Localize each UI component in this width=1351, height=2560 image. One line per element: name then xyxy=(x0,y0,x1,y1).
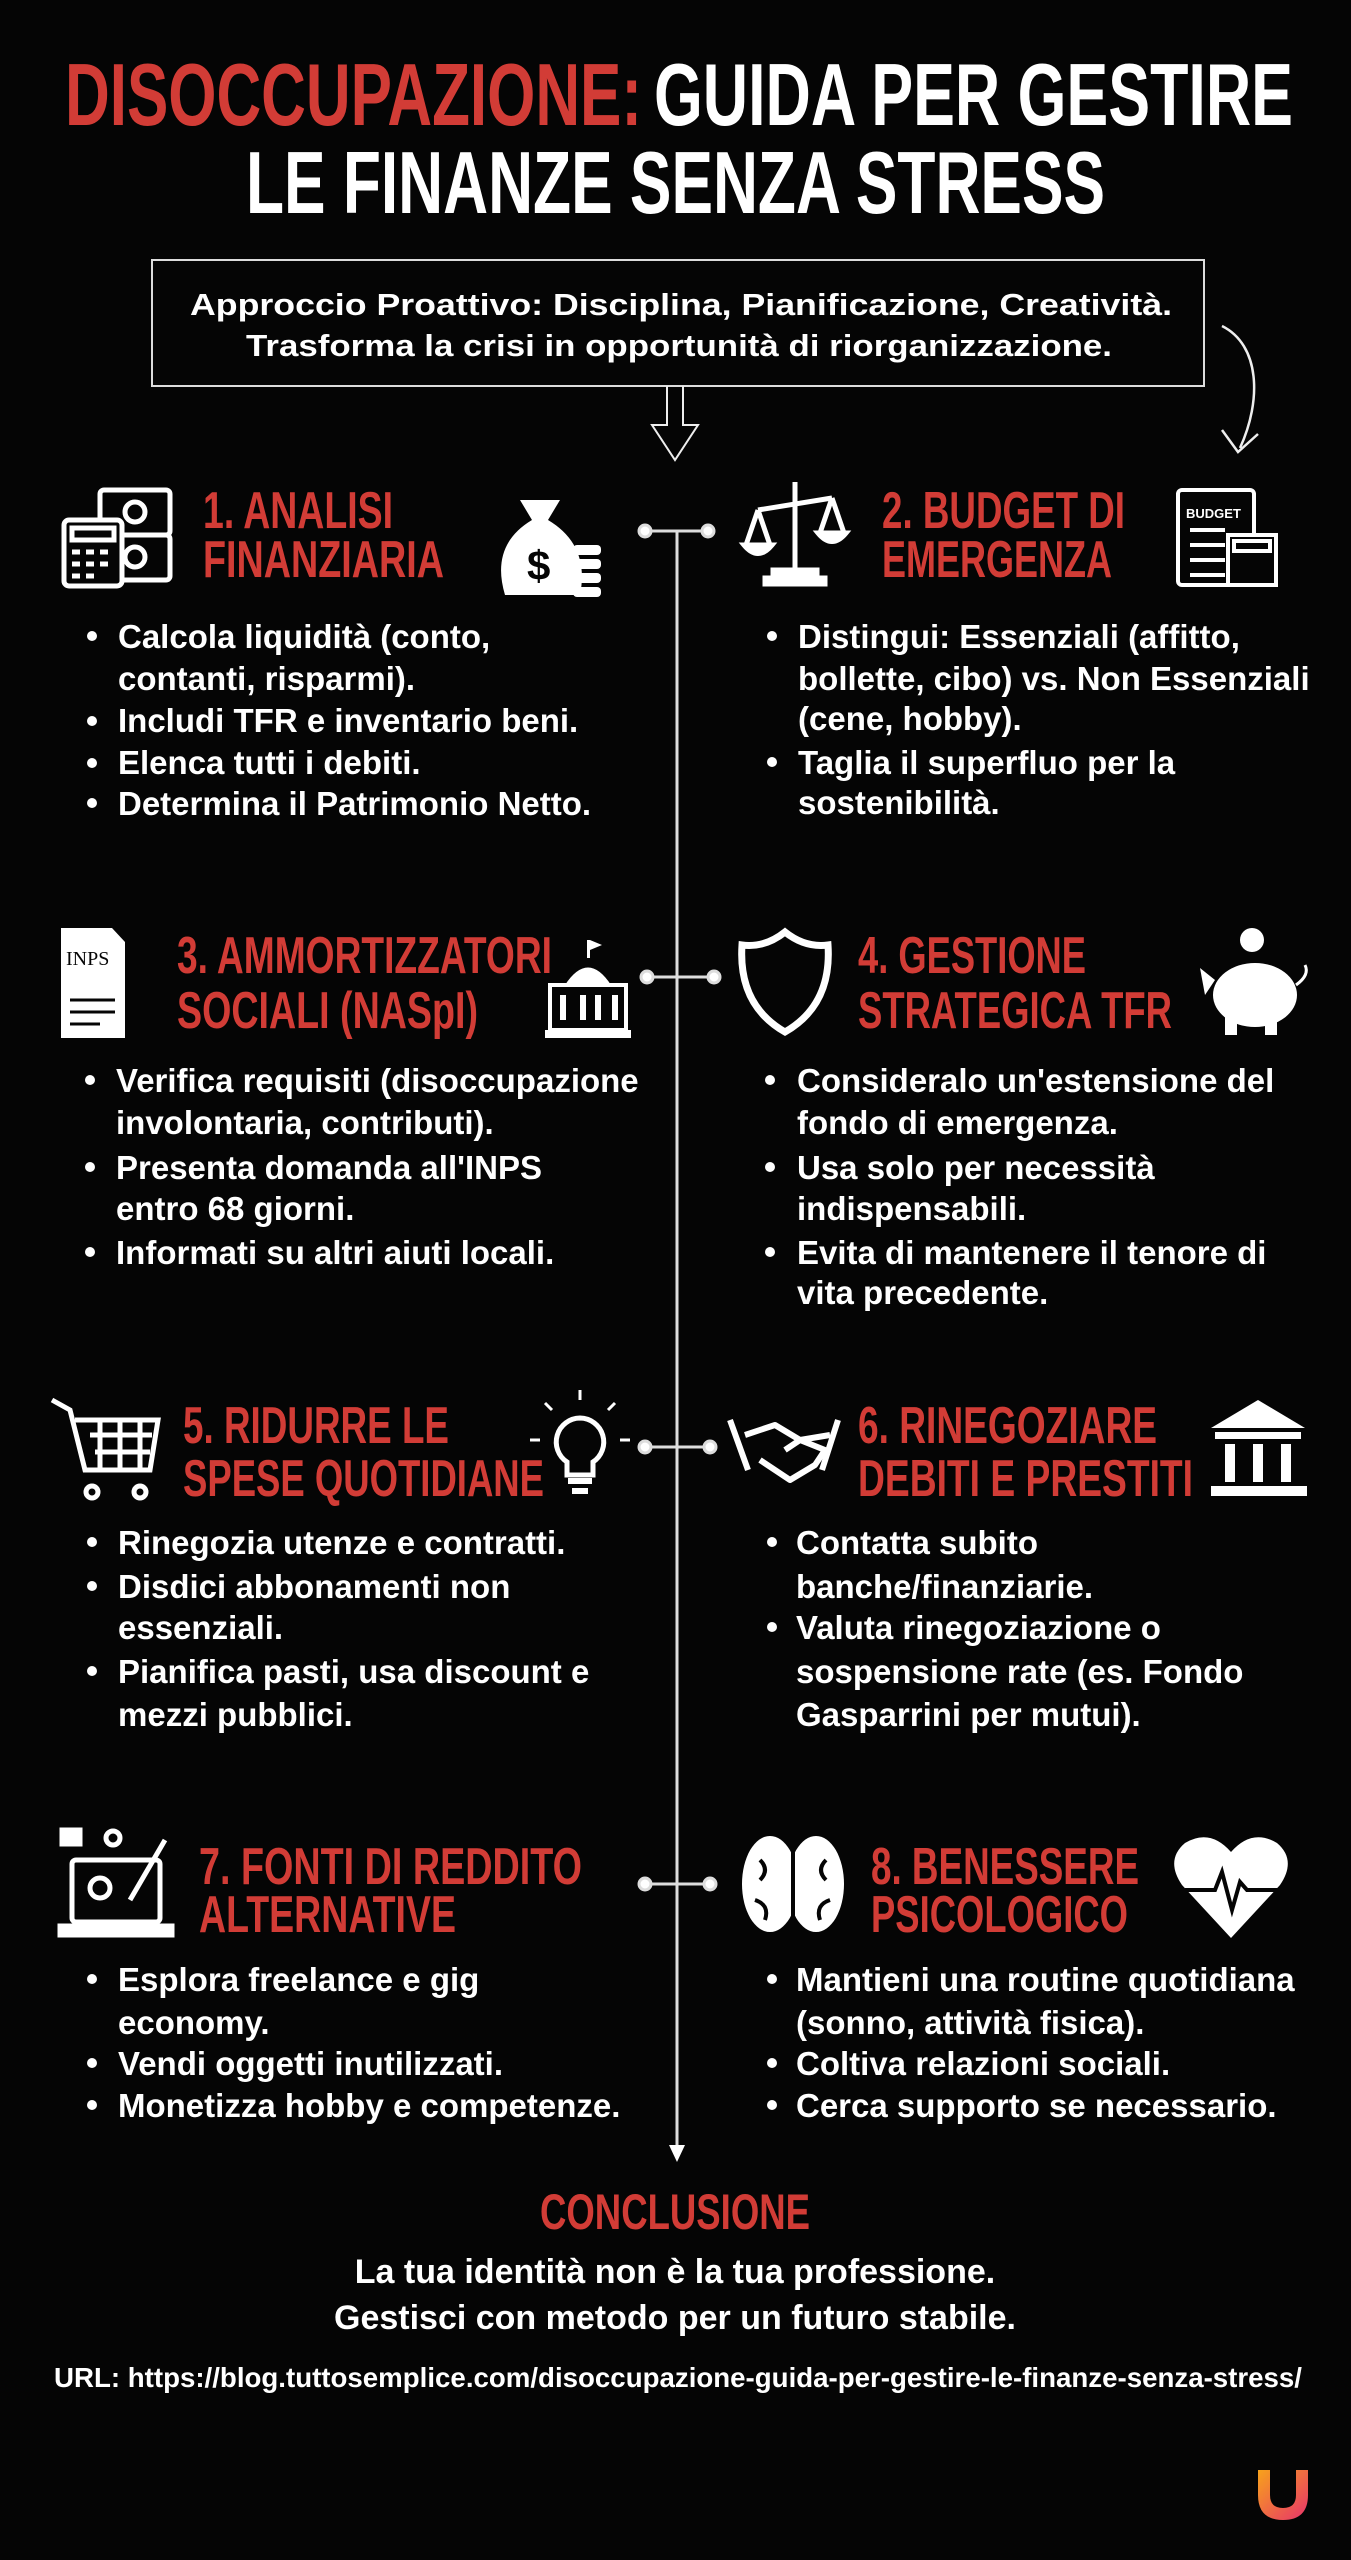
heading: 1. ANALISI xyxy=(203,482,393,540)
panel: 5 ridurre le spese: SPESE QUOTIDIANE xyxy=(183,1450,544,1508)
bullets: Informati su altri aiuti locali. xyxy=(116,1234,554,1271)
bullets: Determina il Patrimonio Netto. xyxy=(118,785,591,822)
timeline line xyxy=(639,525,720,2162)
conclusion: Gestisci con metodo per un futuro stabile. xyxy=(334,2299,1016,2337)
title xyxy=(65,45,1293,232)
bullets: Rinegozia utenze e contratti. xyxy=(118,1524,565,1561)
bullets: Vendi oggetti inutilizzati. xyxy=(118,2045,503,2082)
bullets: sostenibilità. xyxy=(798,784,1000,821)
intro box xyxy=(152,260,1204,386)
panel: 4 gestione strategica TFR xyxy=(742,927,1306,1311)
panel: 5 ridurre le spese xyxy=(52,1390,630,1733)
icon: heart with pulse xyxy=(1174,1837,1288,1938)
bullets: banche/finanziarie. xyxy=(796,1568,1093,1605)
bullets: Elenca tutti i debiti. xyxy=(118,744,421,781)
panel: 3 ammortizzatori sociali xyxy=(61,927,639,1271)
bullets: (sonno, attività fisica). xyxy=(796,2004,1144,2041)
icon: government building xyxy=(545,940,631,1038)
panel: 7 fonti di reddito xyxy=(60,1830,620,2124)
bullets: Mantieni una routine quotidiana xyxy=(796,1961,1295,1998)
bullets: Calcola liquidità (conto, xyxy=(118,618,490,655)
bullets: Monetizza hobby e competenze. xyxy=(118,2087,620,2124)
panel: 8 benessere psicologico: PSICOLOGICO xyxy=(871,1886,1128,1944)
bullets: Taglia il superfluo per la xyxy=(798,744,1176,781)
bullets: involontaria, contributi). xyxy=(116,1104,494,1141)
bullets: Cerca supporto se necessario. xyxy=(796,2087,1277,2124)
icon: bank xyxy=(1211,1400,1307,1496)
bullets: vita precedente. xyxy=(797,1274,1048,1311)
intro box: Trasforma la crisi in opportunità di riorganizzazione. xyxy=(246,328,1112,363)
panel: 8 benessere psicologico xyxy=(742,1836,1295,2124)
icon: money bag: $ xyxy=(527,542,550,589)
icon: scales xyxy=(744,482,846,584)
arrow: curved right xyxy=(1222,326,1258,452)
bullets xyxy=(87,618,591,822)
bullets xyxy=(85,1062,639,1271)
icon: budget clipboard: BUDGET xyxy=(1186,506,1241,521)
bullets: essenziali. xyxy=(118,1609,283,1646)
heading: 8. BENESSERE xyxy=(871,1838,1139,1896)
icon: light bulb xyxy=(530,1390,630,1494)
icon: shield xyxy=(742,932,828,1032)
title: DISOCCUPAZIONE: xyxy=(65,45,642,144)
intro box: Approccio Proattivo: Disciplina, Pianificazione, Creatività. xyxy=(190,287,1172,322)
heading: 2. BUDGET DI xyxy=(882,482,1125,540)
bullets: economy. xyxy=(118,2004,270,2041)
icon: INPS document: INPS xyxy=(66,948,109,970)
panel: 3 ammortizzatori sociali: SOCIALI (NASpI) xyxy=(177,982,478,1040)
bullets: Verifica requisiti (disoccupazione xyxy=(116,1062,639,1099)
bullets: bollette, cibo) vs. Non Essenziali xyxy=(798,660,1310,697)
heading: 4. GESTIONE xyxy=(858,927,1086,985)
heading: 7. FONTI DI REDDITO xyxy=(199,1838,582,1896)
panel: 2 budget di emergenza xyxy=(744,482,1310,821)
bullets: Gasparrini per mutui). xyxy=(796,1696,1141,1733)
bullets xyxy=(767,1524,1243,1733)
bullets: contanti, risparmi). xyxy=(118,660,415,697)
bullets: Evita di mantenere il tenore di xyxy=(797,1234,1266,1271)
bullets: indispensabili. xyxy=(797,1190,1026,1227)
bullets: (cene, hobby). xyxy=(798,700,1022,737)
bullets xyxy=(87,1524,589,1733)
panel: 6 rinegoziare debiti xyxy=(730,1397,1307,1733)
icon: handshake xyxy=(730,1420,838,1480)
panel: 4 gestione strategica TFR: STRATEGICA TFR xyxy=(858,982,1172,1040)
url: URL: https://blog.tuttosemplice.com/disoccupazione-guida-per-gestire-le-finanze-senza-stress/ xyxy=(54,2362,1302,2393)
panel: 2 budget di emergenza: EMERGENZA xyxy=(882,531,1112,589)
icon: calculator and cash xyxy=(64,490,170,586)
bullets: Esplora freelance e gig xyxy=(118,1961,479,1998)
bullets xyxy=(87,1961,620,2124)
icon: money bag xyxy=(501,500,601,597)
icon: shopping cart xyxy=(52,1400,158,1498)
bullets: fondo di emergenza. xyxy=(797,1104,1118,1141)
bullets: Includi TFR e inventario beni. xyxy=(118,702,578,739)
bullets: sospensione rate (es. Fondo xyxy=(796,1653,1243,1690)
bullets: mezzi pubblici. xyxy=(118,1696,353,1733)
bullets: Disdici abbonamenti non xyxy=(118,1568,510,1605)
bullets xyxy=(767,618,1310,821)
bullets xyxy=(767,1961,1295,2124)
icon: piggy bank xyxy=(1200,928,1306,1035)
heading: 6. RINEGOZIARE xyxy=(858,1397,1157,1455)
bullets: Contatta subito xyxy=(796,1524,1038,1561)
heading: 5. RIDURRE LE xyxy=(183,1397,449,1455)
bullets: entro 68 giorni. xyxy=(116,1190,354,1227)
icon: INPS document xyxy=(61,928,125,1038)
icon: budget clipboard xyxy=(1178,490,1276,585)
bullets: Pianifica pasti, usa discount e xyxy=(118,1653,589,1690)
conclusion: CONCLUSIONE xyxy=(540,2184,810,2240)
bullets xyxy=(765,1062,1274,1311)
conclusion: La tua identità non è la tua professione. xyxy=(355,2253,995,2291)
bullets: Consideralo un'estensione del xyxy=(797,1062,1274,1099)
conclusion xyxy=(334,2184,1016,2337)
bullets: Presenta domanda all'INPS xyxy=(116,1149,542,1186)
bullets: Coltiva relazioni sociali. xyxy=(796,2045,1170,2082)
bullets: Usa solo per necessità xyxy=(797,1149,1155,1186)
heading: 3. AMMORTIZZATORI xyxy=(177,927,552,985)
panel: 1 analisi finanziaria xyxy=(64,482,601,822)
icon: brain xyxy=(742,1836,844,1932)
panel: 7 fonti di reddito: ALTERNATIVE xyxy=(199,1886,456,1944)
panel: 6 rinegoziare debiti: DEBITI E PRESTITI xyxy=(858,1450,1193,1508)
panel: 1 analisi finanziaria: FINANZIARIA xyxy=(203,531,444,589)
logo xyxy=(1258,2470,1308,2520)
bullets: Valuta rinegoziazione o xyxy=(796,1609,1161,1646)
arrow: down from box xyxy=(652,386,698,460)
icon: laptop with tools xyxy=(60,1830,172,1935)
bullets: Distingui: Essenziali (affitto, xyxy=(798,618,1240,655)
